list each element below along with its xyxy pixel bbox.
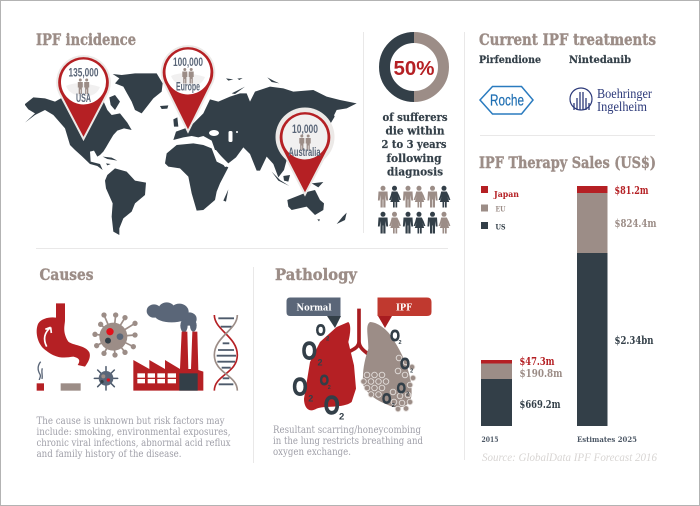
causes icons	[37, 302, 237, 391]
label: Pirfendione: Pirfendione	[479, 54, 541, 66]
icon: factory with smoke	[133, 302, 203, 391]
callout: IPF: IPF	[396, 302, 412, 314]
legend: Japan	[493, 189, 519, 199]
bar: Estimates 2025	[577, 183, 656, 444]
oxygen labels	[292, 322, 413, 422]
text: of sufferers die within 2 to 3 years following diagnosis: 2 to 3 years	[382, 137, 446, 151]
oxygen labels: 2	[398, 340, 402, 346]
oxygen labels: O	[400, 356, 410, 373]
callout: Normal	[286, 298, 341, 328]
lung illustration	[286, 298, 432, 422]
pin: Europe 100,000: 100,000	[173, 55, 203, 69]
text: pathology description: Resultant scarring/honeycombing	[273, 425, 422, 436]
text: pathology description	[273, 425, 424, 458]
text: causes description: chronic viral infections, abnormal acid reflux	[36, 438, 231, 449]
icon: DNA helix	[214, 315, 237, 391]
text: of sufferers die within 2 to 3 years following diagnosis: die within	[386, 124, 445, 138]
oxygen labels: O	[320, 372, 329, 388]
logo: Boehringer Ingelheim: Ingelheim	[597, 99, 647, 114]
trachea	[348, 309, 368, 354]
text: of sufferers die within 2 to 3 years following diagnosis: of sufferers	[382, 110, 448, 124]
text: of sufferers die within 2 to 3 years following diagnosis	[382, 110, 448, 178]
oxygen labels: 2	[406, 392, 409, 398]
oxygen labels: 2	[326, 336, 330, 342]
heading: IPF incidence: IPF incidence	[36, 30, 136, 49]
bar: 2015	[481, 354, 562, 444]
oxygen labels: 2	[392, 403, 395, 409]
oxygen labels: 2	[410, 368, 413, 374]
bar: Estimates 2025: $81.2m	[614, 183, 648, 197]
bar: Estimates 2025: $824.4m	[614, 216, 656, 230]
oxygen labels: O	[292, 373, 308, 401]
oxygen labels: 2	[328, 385, 331, 391]
heading: Pathology: Pathology	[275, 265, 358, 284]
legend: EU	[496, 204, 506, 214]
pictogram: people, half affected	[378, 186, 450, 234]
IPF lung	[363, 322, 412, 407]
oxygen labels: 2	[339, 412, 344, 422]
text: pathology description: in the lung restricts breathing and	[273, 436, 424, 447]
pin: Europe 100,000: Europe	[176, 80, 200, 94]
pin: USA 135,000: USA	[76, 91, 91, 105]
oxygen labels: O	[324, 391, 340, 420]
bar: 2015: 2015	[482, 435, 498, 444]
legend: US	[496, 222, 506, 232]
bar: 2015: $47.3m	[520, 354, 554, 368]
oxygen labels: O	[302, 337, 317, 365]
honeycombing	[361, 355, 416, 412]
logo: Boehringer Ingelheim: Boehringer	[597, 86, 652, 101]
icon: large virus	[92, 312, 138, 358]
heading: IPF Therapy Sales: IPF Therapy Sales (US$)	[479, 153, 656, 172]
oxygen labels: O	[397, 380, 406, 396]
heading: Causes: Causes	[40, 265, 94, 284]
logo: Boehringer Ingelheim	[570, 86, 652, 114]
logo: Roche	[480, 86, 533, 114]
heading: Current IPF treatments: Current IPF treatments	[479, 30, 656, 49]
pin: USA 135,000: 135,000	[68, 66, 99, 80]
callout: IPF	[378, 298, 432, 328]
donut chart: 50%: 50%	[394, 58, 435, 80]
bar: 2015: $669.2m	[520, 397, 560, 411]
text: causes description: include: smoking, environmental exposures,	[36, 427, 230, 438]
text: causes description: and family history of the disease.	[36, 449, 182, 460]
oxygen labels: 2	[317, 358, 323, 368]
icon: small virus	[94, 367, 118, 390]
bar: Estimates 2025: Estimates 2025	[577, 435, 637, 444]
logo: Roche: Roche	[490, 92, 524, 110]
donut chart: 50%	[385, 38, 443, 96]
oxygen labels: 2	[308, 394, 313, 404]
text: causes description	[36, 416, 231, 460]
pin: Australia 10,000: Australia	[288, 145, 321, 159]
legend	[481, 186, 519, 232]
world map	[25, 73, 357, 235]
callout: Normal: Normal	[296, 302, 332, 314]
oxygen labels: O	[382, 390, 391, 407]
text: of sufferers die within 2 to 3 years following diagnosis: following	[386, 151, 442, 165]
icon: stomach	[37, 303, 90, 367]
text: causes description: The cause is unknown but risk factors may	[36, 416, 225, 427]
source note: Source: GlobalData IPF Forecast 2016	[482, 452, 657, 464]
oxygen labels: O	[390, 328, 400, 345]
pin: Europe 100,000	[162, 46, 214, 132]
icon: cigarette	[37, 362, 81, 391]
pin: Australia 10,000: 10,000	[292, 122, 318, 136]
text: pathology description: oxygen exchange.	[273, 447, 351, 458]
bar: Estimates 2025: $2.34bn	[614, 333, 654, 347]
oxygen labels: O	[316, 322, 326, 340]
pin: USA 135,000	[57, 56, 110, 139]
text: of sufferers die within 2 to 3 years following diagnosis: diagnosis	[387, 164, 443, 178]
normal lung	[304, 322, 356, 410]
pin: Australia 10,000	[276, 108, 334, 194]
label: Nintedanib: Nintedanib	[569, 54, 631, 66]
bar: 2015: $190.8m	[520, 366, 562, 380]
